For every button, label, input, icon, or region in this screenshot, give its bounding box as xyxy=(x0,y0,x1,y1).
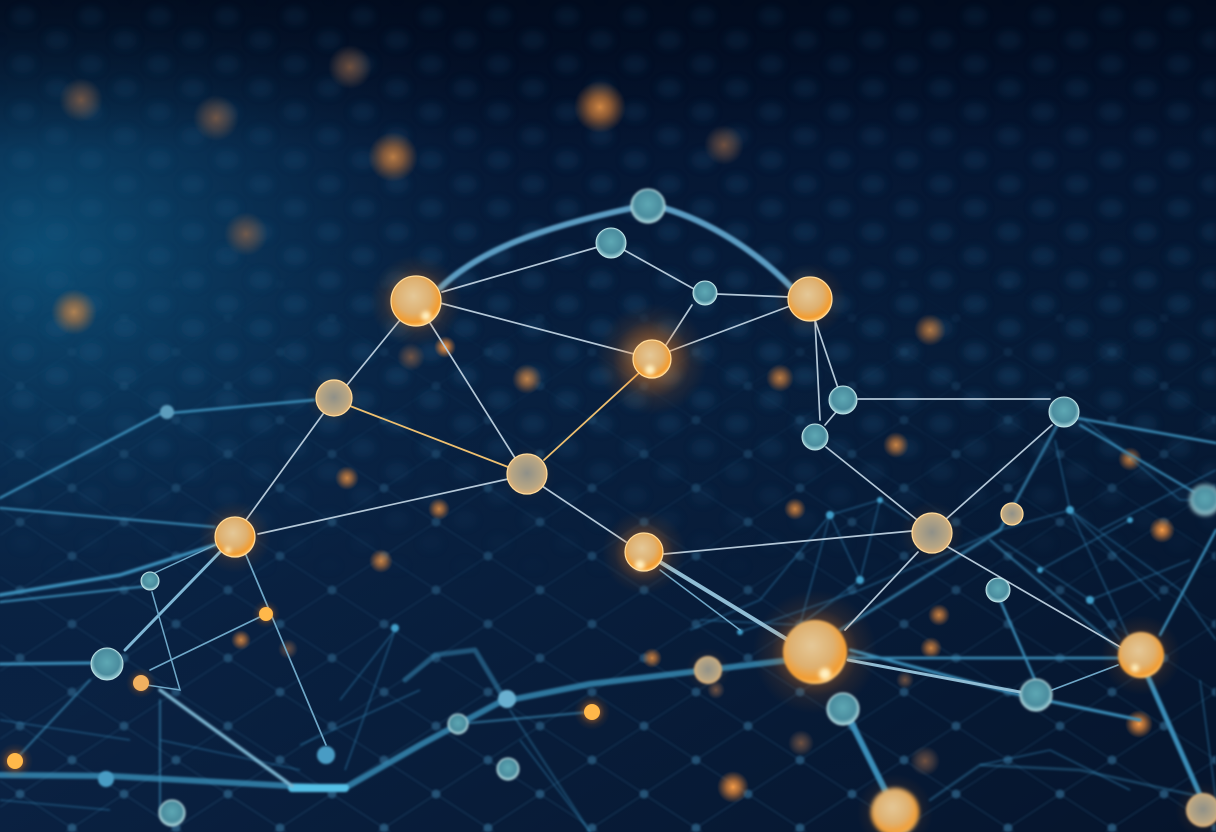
highlighted amber links xyxy=(350,372,640,467)
blue glass nodes xyxy=(91,189,1216,826)
arc links at top of network xyxy=(440,208,792,288)
perspective lattice grid xyxy=(0,315,1216,832)
orange glass nodes xyxy=(7,276,1216,832)
small teal mesh dots xyxy=(391,497,1133,635)
bright hot spots on main nodes xyxy=(225,311,1139,680)
thick blurred blue links in background xyxy=(0,400,1216,832)
blurred dot field at top xyxy=(14,8,1216,499)
glows around orange nodes xyxy=(0,255,1216,832)
thin network links xyxy=(125,247,1122,745)
dense blue mesh in lower right xyxy=(0,420,1216,832)
